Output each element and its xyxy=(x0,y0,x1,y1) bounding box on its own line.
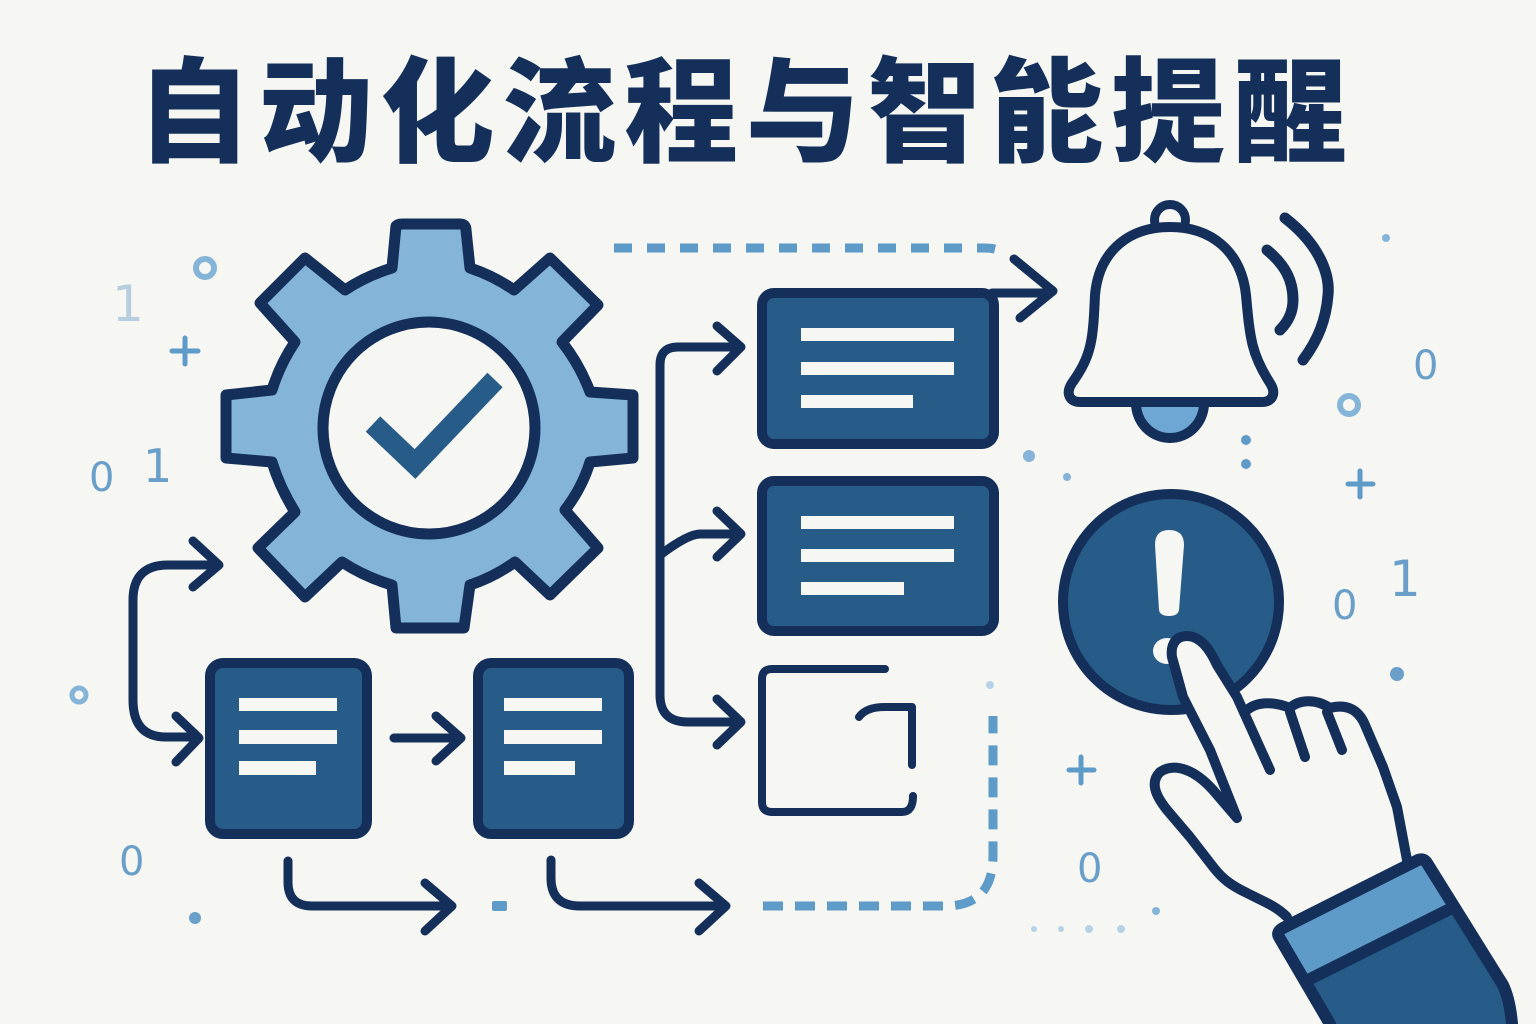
dashed connector: top xyxy=(614,248,1008,256)
binary digits and plus decorations: 1 xyxy=(143,439,172,493)
arrow: card 1 to card 2 xyxy=(394,716,461,761)
sleeve xyxy=(1278,859,1516,1024)
output card 1 xyxy=(762,293,994,444)
dash fragment xyxy=(492,901,507,911)
binary digits and plus decorations: 0 xyxy=(1077,846,1102,892)
bottom arrow 1 xyxy=(288,861,452,931)
dashed connector: bottom xyxy=(763,716,993,906)
binary digits and plus decorations: 0 xyxy=(1413,343,1438,389)
binary digits and plus decorations xyxy=(72,234,1438,933)
title: 自动化流程与智能提醒 xyxy=(137,51,1347,178)
output card 2 xyxy=(762,481,994,631)
empty output card xyxy=(762,669,913,812)
process card 2 xyxy=(478,663,629,834)
binary digits and plus decorations: 1 xyxy=(1389,550,1421,608)
loop arrow: box to gear xyxy=(133,541,219,762)
binary digits and plus decorations: 0 xyxy=(119,839,144,885)
icon: gear with check xyxy=(226,224,633,628)
icon: bell xyxy=(1069,204,1328,438)
process card 1 xyxy=(210,663,367,834)
binary digits and plus decorations: 0 xyxy=(89,455,114,501)
bottom arrow 2 xyxy=(551,860,726,931)
binary digits and plus decorations: 1 xyxy=(112,275,144,333)
icon: alert circle xyxy=(1063,494,1279,710)
icon: pointing hand xyxy=(1154,636,1407,917)
binary digits and plus decorations: 0 xyxy=(1332,583,1357,629)
branching arrows xyxy=(660,326,741,745)
arrow: card 1 to bell xyxy=(992,259,1053,318)
